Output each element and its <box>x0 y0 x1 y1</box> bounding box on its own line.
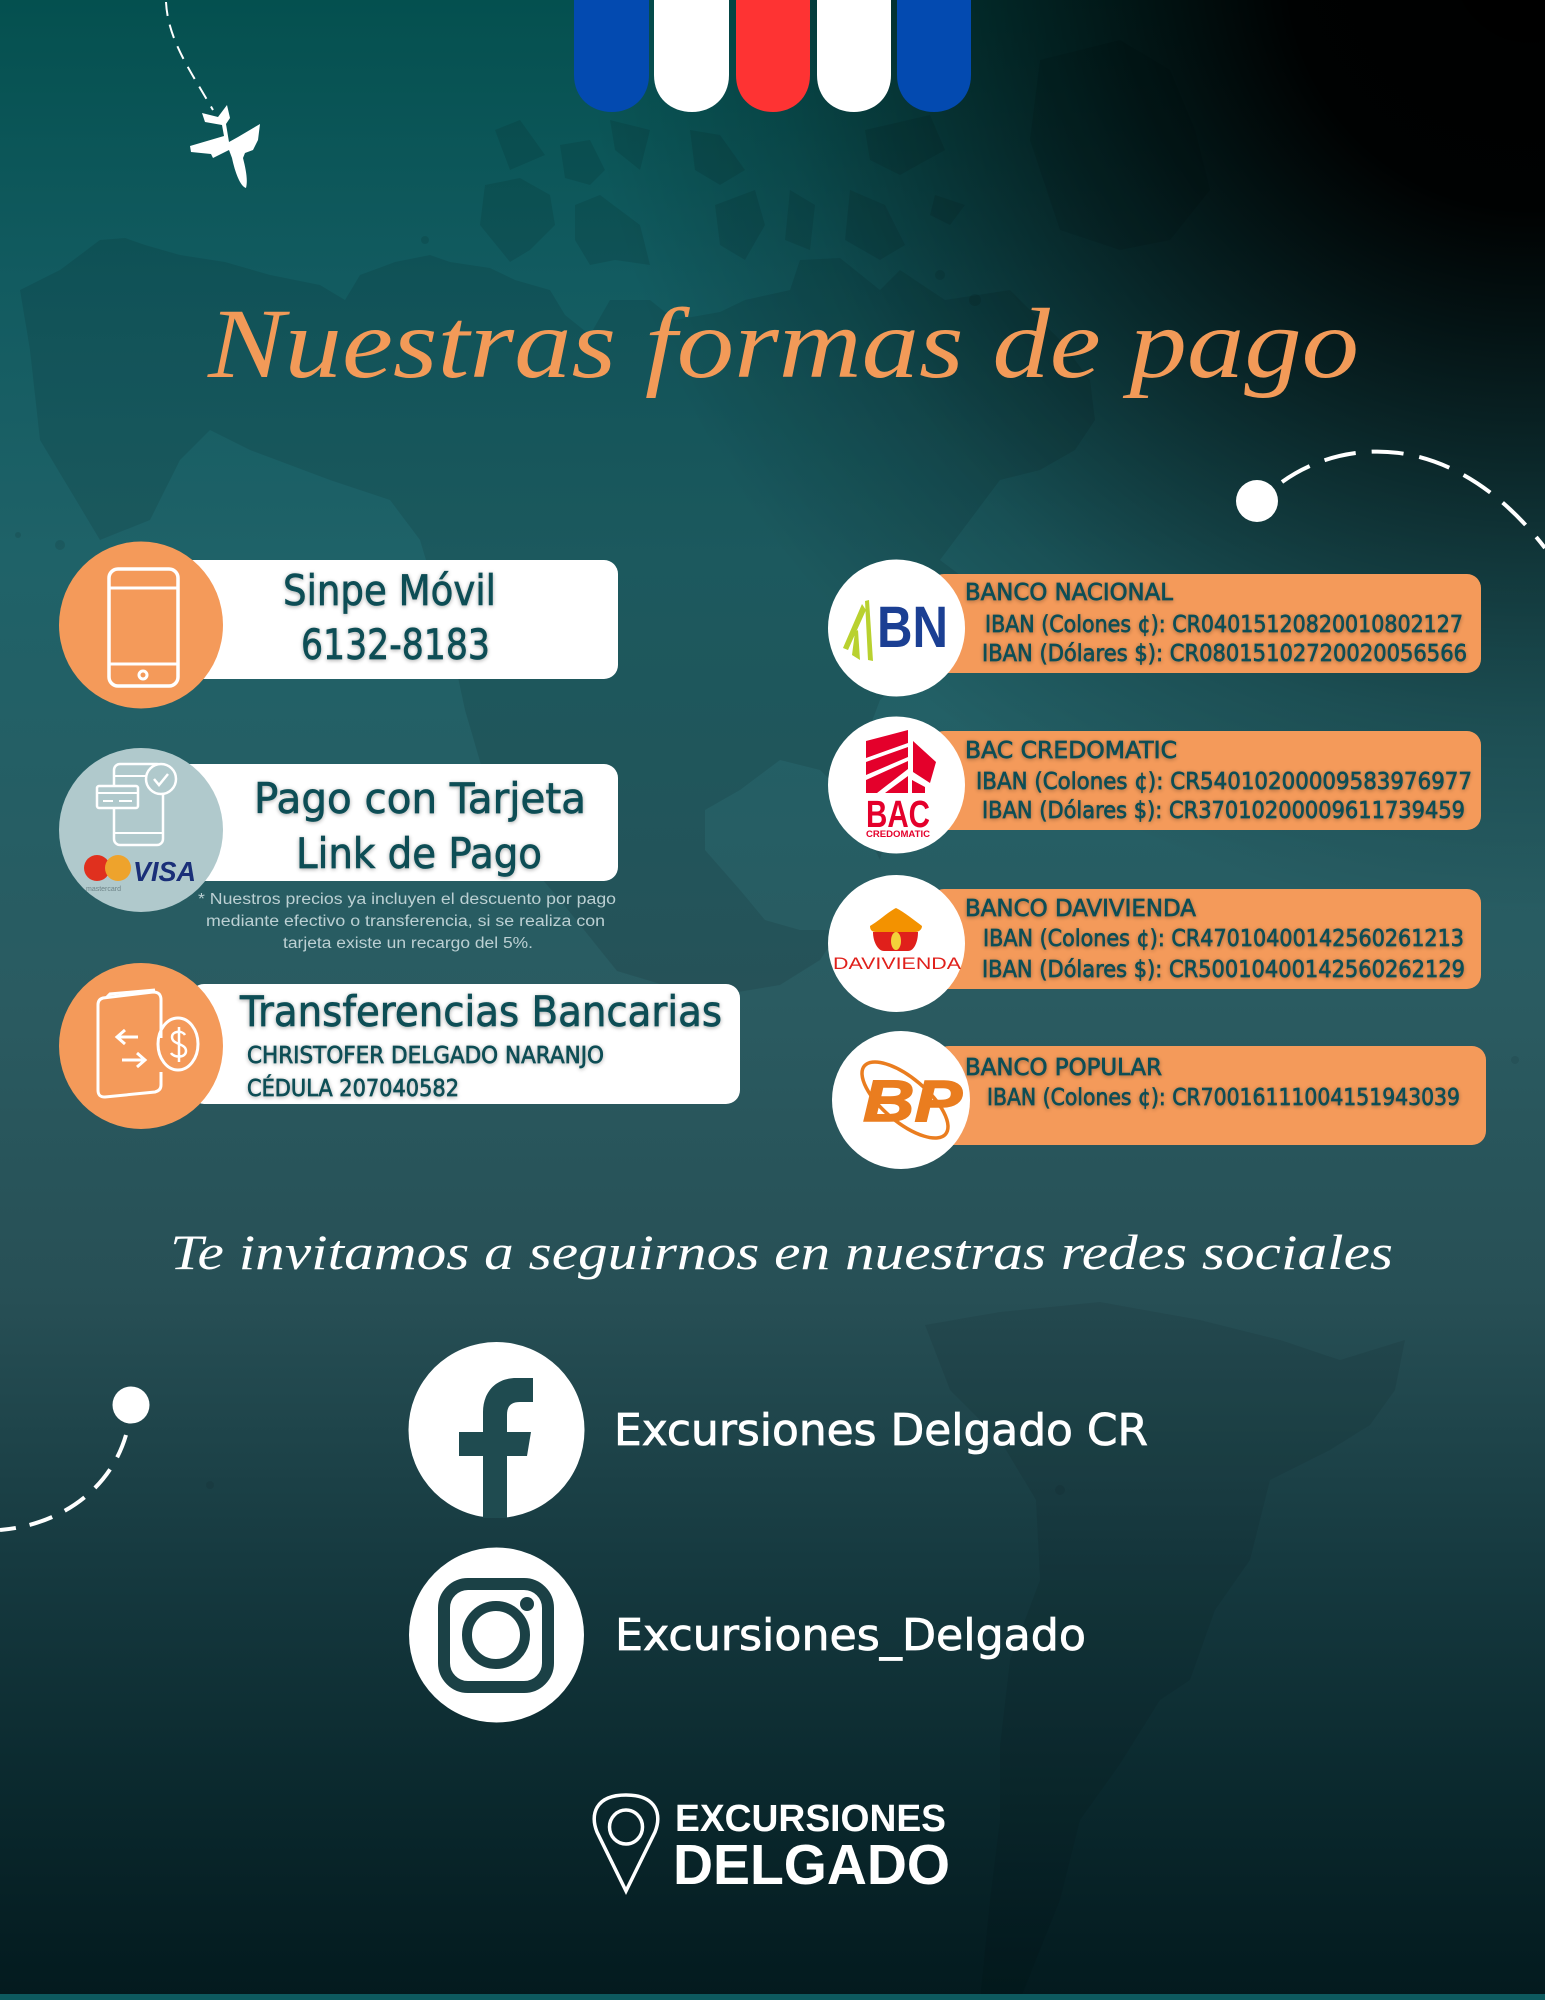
instagram row <box>409 1548 1086 1722</box>
text: IBAN (Dólares $): CR37010200009611739459 <box>982 798 1465 824</box>
icon: card payment <box>59 748 223 912</box>
card <box>935 1046 1486 1145</box>
text: Pago con Tarjeta <box>254 774 586 823</box>
handle: Excursiones Delgado CR <box>614 1405 1148 1456</box>
icon: location pin <box>594 1795 658 1891</box>
card <box>930 889 1481 989</box>
icon: BN logo <box>828 560 965 696</box>
text: IBAN (Colones ¢): CR47010400142560261213 <box>983 926 1464 952</box>
text: BAC CREDOMATIC <box>965 738 1177 764</box>
text: IBAN (Dólares $): CR08015102720020056566 <box>982 641 1467 667</box>
icon: BP logo <box>832 1031 970 1169</box>
text: BANCO NACIONAL <box>965 580 1173 606</box>
social heading: Te invitamos a seguirnos en nuestras redes sociales <box>170 1224 1393 1280</box>
icon: money transfer <box>59 963 223 1129</box>
dashed route bottom left <box>0 1386 150 1530</box>
panel: BAC Credomatic <box>828 716 1481 854</box>
plane with dashed trail <box>166 2 260 188</box>
text: IBAN (Dólares $): CR50010400142560262129 <box>982 957 1465 983</box>
text: BANCO POPULAR <box>965 1055 1162 1081</box>
panel: Banco Popular <box>832 1031 1486 1169</box>
icon: Davivienda logo <box>828 875 965 1012</box>
icon: BN logo: BN <box>877 595 948 660</box>
text: Sinpe Móvil <box>283 566 496 615</box>
bottom strip <box>0 1994 1545 2000</box>
text <box>965 738 1472 824</box>
flag stripes <box>574 0 971 112</box>
icon: BP logo: BP <box>863 1069 962 1134</box>
card <box>170 764 618 881</box>
panel: Transferencias Bancarias <box>59 963 740 1129</box>
world map silhouette <box>15 40 1210 995</box>
panel: Banco Nacional <box>828 560 1481 696</box>
text: Transferencias Bancarias <box>239 987 722 1036</box>
text: IBAN (Colones ¢): CR70016111004151943039 <box>987 1085 1460 1111</box>
text: Link de Pago <box>296 829 542 878</box>
logo: Excursiones Delgado: EXCURSIONES <box>675 1798 946 1840</box>
text <box>965 1055 1460 1111</box>
icon: card payment: mastercard <box>86 886 121 893</box>
card <box>930 731 1481 830</box>
icon: BAC logo <box>828 716 965 854</box>
panel: Pago con Tarjeta <box>59 748 618 952</box>
dashed route top right <box>1236 452 1545 548</box>
text <box>239 987 722 1102</box>
text: BANCO DAVIVIENDA <box>965 896 1196 922</box>
facebook row <box>408 1342 1148 1518</box>
title: Nuestras formas de pago <box>207 288 1359 399</box>
card <box>190 984 740 1104</box>
text <box>965 580 1467 667</box>
icon: Davivienda logo: DAVIVIENDA <box>833 954 962 973</box>
handle: Excursiones_Delgado <box>615 1610 1086 1661</box>
note: * Nuestros precios ya incluyen el descuento por pago <box>198 891 616 908</box>
logo: Excursiones Delgado <box>594 1795 950 1897</box>
icon: facebook <box>408 1342 584 1518</box>
text: IBAN (Colones ¢): CR54010200009583976977 <box>976 769 1472 795</box>
note <box>198 891 616 952</box>
text: IBAN (Colones ¢): CR04015120820010802127 <box>985 612 1463 638</box>
icon: card payment: VISA <box>133 856 196 887</box>
icon: phone <box>59 542 223 708</box>
note: tarjeta existe un recargo del 5%. <box>283 935 533 952</box>
text <box>254 774 586 878</box>
text <box>283 566 496 669</box>
text <box>965 896 1465 983</box>
icon: BAC logo: BAC <box>866 794 930 836</box>
text: CÉDULA 207040582 <box>247 1074 459 1102</box>
note: mediante efectivo o transferencia, si se realiza con <box>206 913 605 930</box>
text: CHRISTOFER DELGADO NARANJO <box>247 1043 604 1069</box>
panel: Banco Davivienda <box>828 875 1481 1012</box>
logo: Excursiones Delgado: DELGADO <box>673 1833 950 1897</box>
card <box>170 560 618 679</box>
icon: instagram <box>409 1548 584 1722</box>
panel: Sinpe Movil <box>59 542 618 708</box>
card <box>930 574 1481 673</box>
text: 6132-8183 <box>301 620 490 669</box>
icon: BAC logo: CREDOMATIC <box>866 829 931 839</box>
